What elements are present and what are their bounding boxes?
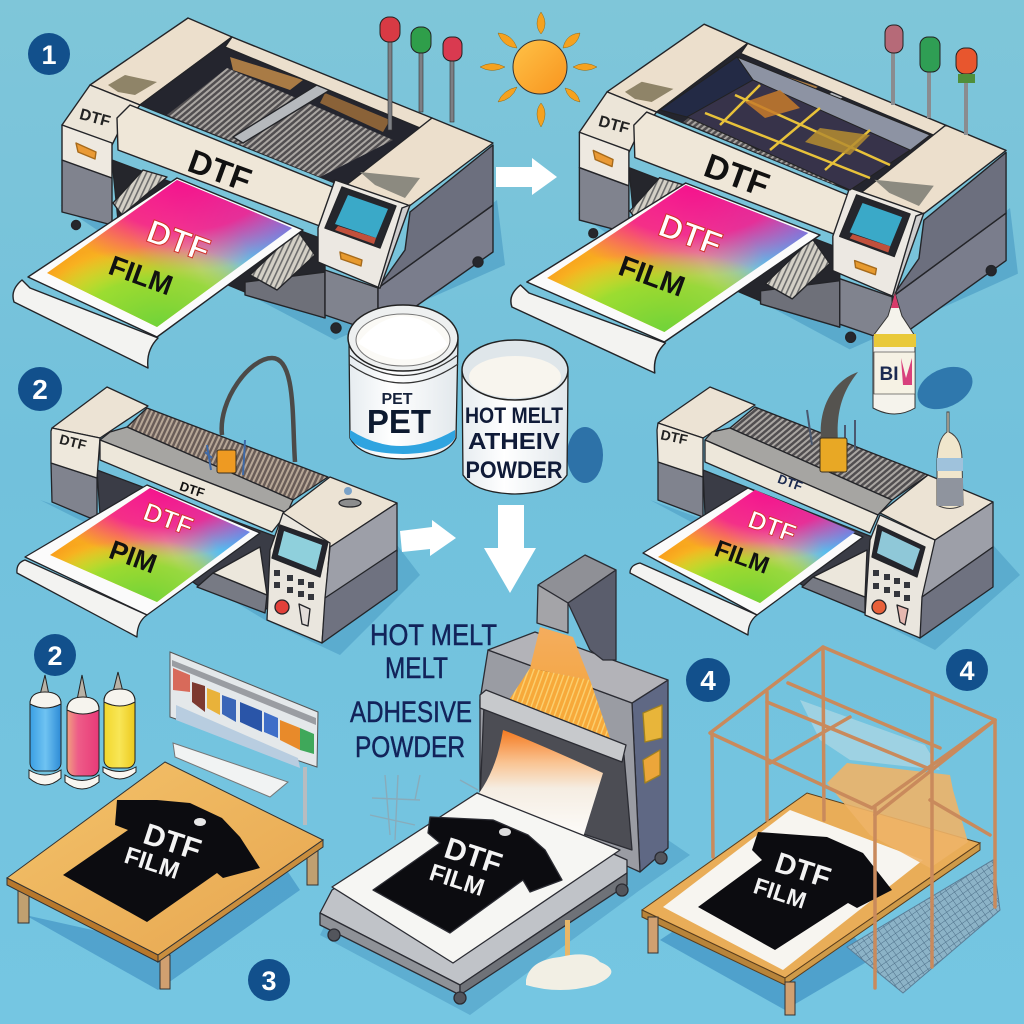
glue bottle: BI	[880, 364, 898, 385]
printer 1: top-left DTF printer: DTF	[183, 142, 256, 199]
hose and print head	[205, 358, 295, 475]
icon: sun	[480, 12, 597, 127]
arrow: down	[484, 505, 536, 593]
label: hot melt adhesive powder: POWDER	[355, 731, 465, 764]
sketch marks	[370, 775, 478, 840]
table with frame and t-shirt, right	[642, 647, 1000, 1015]
heat press machine	[320, 555, 690, 1015]
badge: step 2 upper	[18, 367, 62, 411]
signal lights on printer 2	[885, 25, 977, 135]
printer 4: mid-right printer with print head: DTF	[744, 506, 800, 548]
jar: hot melt adhesive powder: POWDER	[466, 457, 562, 484]
signal lights on printer 1	[380, 17, 462, 130]
printer 4: mid-right printer with print head: DTF	[776, 471, 805, 494]
badge: step 4 left: 4	[700, 665, 716, 696]
printer 1: top-left DTF printer	[13, 18, 505, 368]
badge: step 1	[28, 33, 70, 75]
arrow: top row	[496, 158, 557, 195]
table with t-shirt, left: FILM	[121, 842, 183, 885]
table with frame and t-shirt, right: DTF	[771, 847, 834, 895]
printer 4: mid-right printer with print head: FILM	[711, 535, 773, 580]
badge: step 2 lower	[34, 634, 76, 676]
printer 4: mid-right printer with print head	[630, 387, 1020, 650]
ink bottles	[29, 672, 136, 789]
arrow: middle row	[400, 520, 456, 556]
printer 3: mid-left printer with print head: DTF	[178, 478, 207, 501]
printer 2: top-right DTF printer: DTF	[699, 147, 774, 205]
table with t-shirt, left: DTF	[139, 818, 205, 867]
printer 3: mid-left printer with print head: DTF	[139, 496, 197, 542]
printer 3: mid-left printer with print head	[17, 387, 420, 655]
badge: step 4 left	[686, 658, 730, 702]
badge: step 3: 3	[261, 966, 277, 996]
jar: hot melt adhesive powder	[462, 340, 568, 494]
t-shirt print on press: FILM	[426, 859, 488, 902]
label: hot melt adhesive powder	[350, 619, 497, 764]
printer 2: top-right DTF printer: DTF	[597, 113, 631, 138]
badge: step 4 right: 4	[959, 656, 975, 686]
jar shadow	[567, 427, 603, 483]
label: hot melt adhesive powder: HOT MELT	[370, 619, 497, 652]
printer 1: top-left DTF printer: DTF	[142, 212, 215, 269]
print head and syringe on printer 4	[807, 372, 963, 508]
jar: hot melt adhesive powder: ATHEIV	[468, 428, 561, 454]
jar: PET	[348, 305, 458, 459]
label: hot melt adhesive powder: ADHESIVE	[350, 696, 472, 729]
printer 2: top-right DTF printer	[511, 24, 1018, 373]
badge: step 2 upper: 2	[32, 374, 48, 405]
badge: step 3	[248, 959, 290, 1001]
colour swatch panel	[170, 652, 318, 825]
badge: step 4 right	[946, 649, 988, 691]
printer 4: mid-right printer with print head: DTF	[659, 426, 690, 448]
table with t-shirt, left	[7, 762, 323, 990]
printer 2: top-right DTF printer: DTF	[654, 206, 727, 263]
printer 2: top-right DTF printer: FILM	[614, 250, 689, 304]
jar: hot melt adhesive powder: HOT MELT	[465, 403, 563, 428]
printer 1: top-left DTF printer: FILM	[105, 250, 177, 301]
printer 3: mid-left printer with print head: PIM	[105, 535, 161, 579]
jar: PET: PET	[381, 391, 413, 408]
table with frame and t-shirt, right: FILM	[750, 872, 810, 914]
jar: PET: PET	[367, 403, 431, 440]
badge: step 1: 1	[41, 40, 57, 70]
printer 1: top-left DTF printer: DTF	[78, 106, 112, 131]
t-shirt print on press: DTF	[440, 832, 506, 881]
powder puddle	[526, 920, 611, 990]
badge: step 2 lower: 2	[47, 641, 63, 671]
label: hot melt adhesive powder: MELT	[385, 652, 448, 685]
printer 3: mid-left printer with print head: DTF	[58, 431, 89, 453]
t-shirt print on press	[426, 832, 506, 902]
glue bottle	[873, 293, 979, 417]
